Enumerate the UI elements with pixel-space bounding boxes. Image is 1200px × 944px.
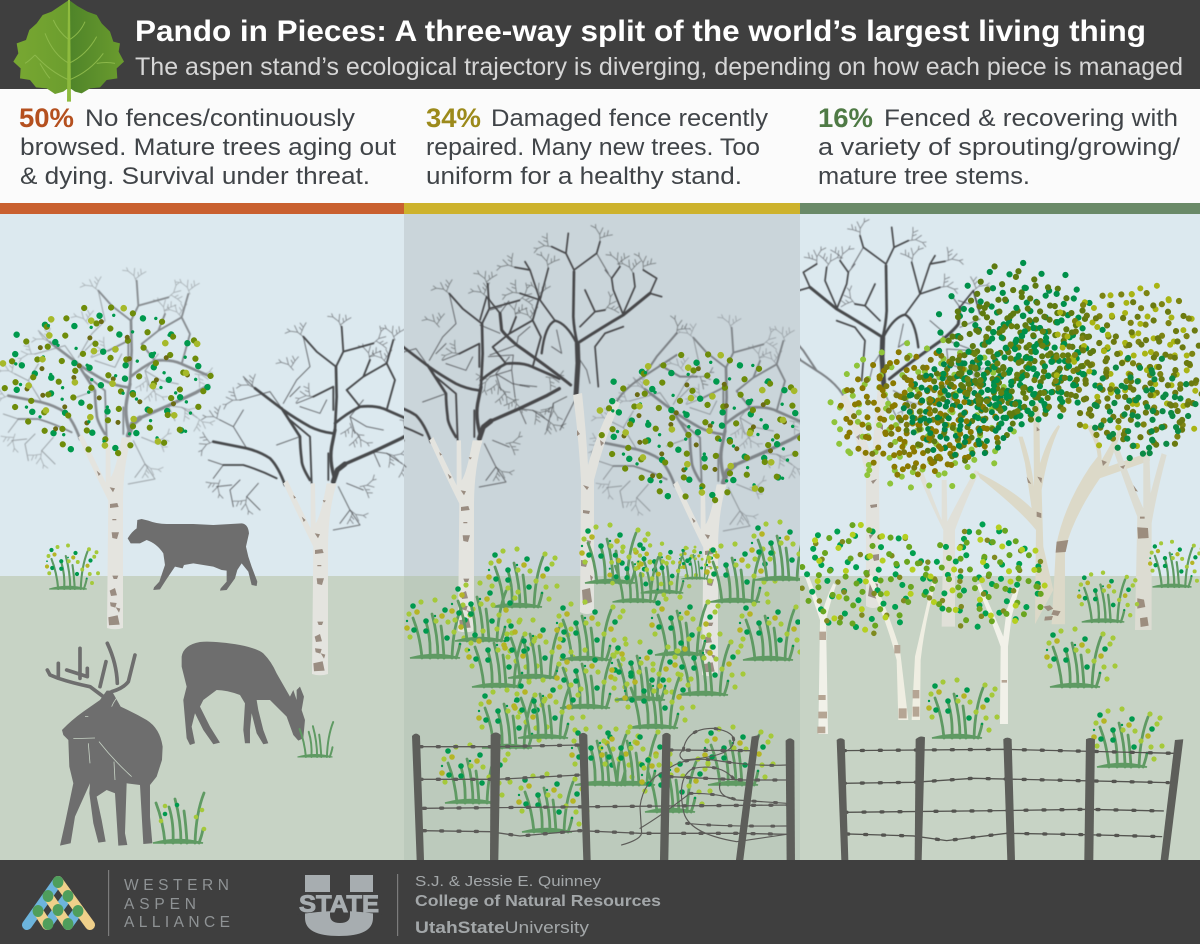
text: Western Aspen Alliance: ASPEN [124,896,196,913]
logo: Utah State U: STATE [299,891,379,918]
text block: 16 percent [818,103,1180,190]
text block: 16 percent: mature tree stems. [818,163,1030,190]
panel: fenced and recovering [800,214,1200,860]
icon: elk [47,643,163,846]
text block: 50 percent: & dying. Survival under threat. [20,163,370,190]
text block: 34 percent: uniform for a healthy stand. [426,163,742,190]
trunk: right dead tree [283,480,337,675]
colour bar: three management shares [0,203,1200,214]
trunk: dead tree [840,387,887,608]
dead tree branches, left [404,270,567,488]
text block: 16 percent: Fenced & recovering with [884,105,1178,132]
text block: 50 percent: browsed. Mature trees aging out [20,134,396,161]
trunk: centre dead tree [573,393,620,614]
text block: 34 percent: 34% [426,103,481,133]
logo: Western Aspen Alliance mark [27,876,90,930]
text: college name [415,873,661,937]
panel: damaged fence recently repaired [404,214,800,860]
footer band [0,860,1200,944]
tree crown: centre, dark green [936,260,1111,428]
leafy tree branches, left [0,268,216,484]
text block: 50 percent: No fences/continuously [85,105,355,132]
text: Western Aspen Alliance: ALLIANCE [124,914,230,931]
logo: Utah State U [296,875,382,936]
text block: 34 percent: Damaged fence recently [491,105,768,132]
mature tree trunks [917,403,1167,630]
icon: grazing deer [182,642,305,745]
footer divider left [108,870,109,936]
sprouting grass tufts [407,522,820,832]
trunk: leafy tree [673,481,727,676]
tree crown: right, yellow-olive [1052,282,1200,462]
dead tree branches [800,218,991,425]
panel: no fences, browsed [0,214,404,860]
text block: 16 percent: a variety of sprouting/growing/ [818,134,1180,161]
young tree crowns: scattered leaves [800,521,1048,636]
text: college name: S.J. & Jessie E. Quinney [415,873,602,890]
dead tree branches, centre [467,223,715,430]
trunk: centre dead tree [957,386,1004,607]
tree crown: scattered leaves [0,304,214,456]
page header band [0,0,1200,89]
grass tuft: far left [47,546,98,589]
text: Western Aspen Alliance [124,877,230,931]
sprouting grass tufts [929,542,1200,767]
broken barbed-wire fence [412,728,795,860]
text: Western Aspen Alliance: WESTERN [124,877,229,894]
trunk: left dead tree [429,437,483,632]
text block: 34 percent [426,103,768,190]
text block: 50 percent [19,103,396,190]
subtitle: The aspen stand’s ecological trajectory is diverging, depending on how each piece is managed [135,53,1183,81]
text: college name: UtahState University [415,918,590,937]
icon: aspen leaf [13,0,124,102]
trunk: left leafy tree [78,434,132,629]
leafy tree branches [589,315,811,531]
tree crown: left, olive and green [828,337,1018,490]
icon: cow [128,519,257,591]
text block: 16 percent: 16% [818,103,873,133]
dead tree branches, centre [851,216,1099,423]
description band [0,89,1200,203]
young trees [805,575,1020,734]
dead tree branches, right [199,314,421,530]
text block: 34 percent: repaired. Many new trees. Too [426,134,760,161]
intact barbed-wire fence [837,736,1183,860]
footer divider right [397,874,398,936]
text block: 50 percent: 50% [19,103,74,133]
grass tuft: by elk [153,793,204,843]
grass tuft: by deer [298,722,333,757]
tree crown: scattered leaves [596,351,800,504]
title: Pando in Pieces: A three-way split of the world’s largest living thing [135,15,1146,48]
text: college name: College of Natural Resources [415,893,661,910]
